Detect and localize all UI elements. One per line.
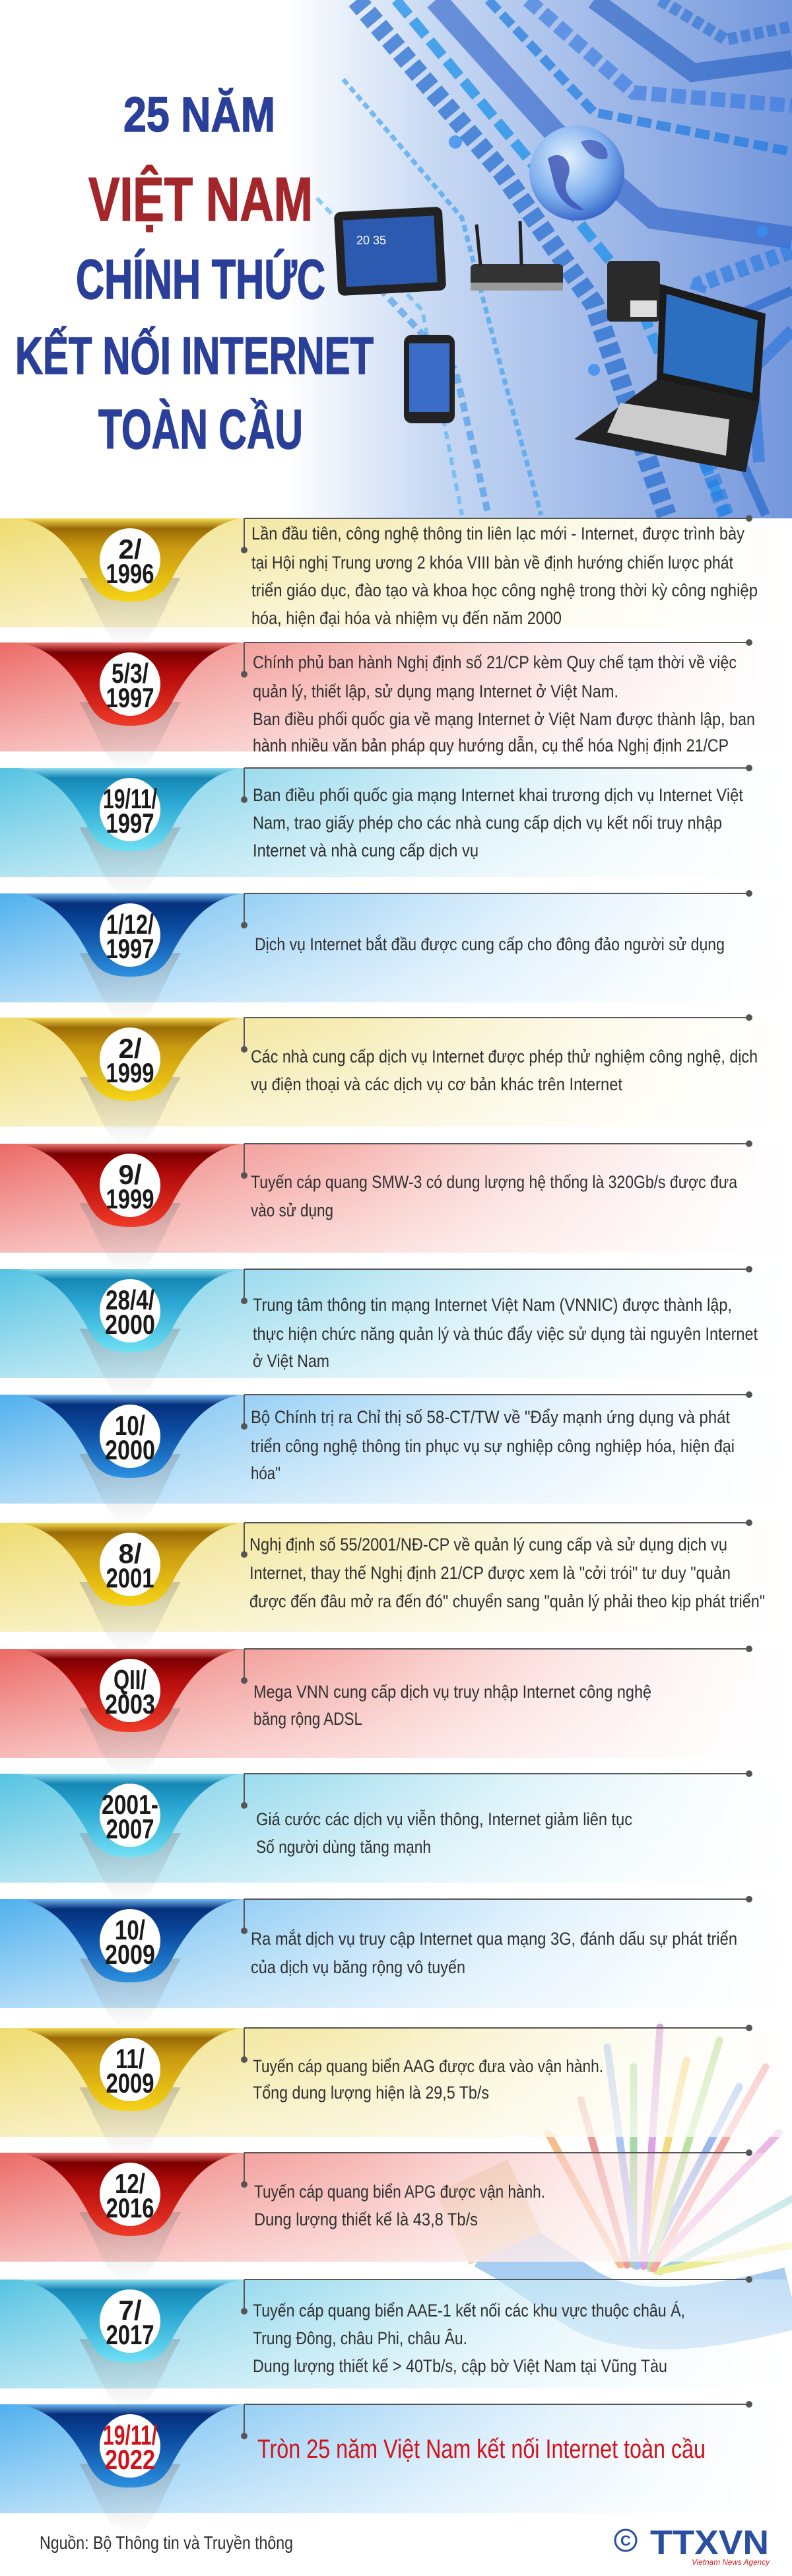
row 5: 2/1999 [0,1015,792,1150]
logo: TTXVN: TTXVN [650,2524,769,2562]
row 6: 9/1999: 1999 [106,1183,154,1214]
row 9: 8/2001: Nghị định số 55/2001/NĐ-CP về quản lý cung cấp và sử dụng dịch vụ [249,1535,727,1554]
row 11: 2001-2007: 2007 [106,1813,154,1844]
header background [0,0,792,518]
row 3: 19/11/1997: Ban điều phối quốc gia mạng Internet khai trương dịch vụ Internet Việt [253,785,743,805]
row 3: 19/11/1997: Internet và nhà cung cấp dịch vụ [253,841,478,860]
icon: phone [404,335,455,423]
row 14: 12/2016: Tuyến cáp quang biển APG được vận hành. [254,2182,545,2202]
row 1: 2/1996: hóa, hiện đại hóa và nhiệm vụ đến năm 2000 [251,608,562,628]
title: CHÍNH THỨC [76,248,325,310]
title: 25 NĂM [123,87,275,142]
title: VIỆT NAM [88,164,313,234]
row 9: 8/2001: Internet, thay thế Nghị định 21/CP được xem là "cởi trói" tư duy "quản [249,1563,731,1583]
row 11: 2001-2007: Số người dùng tăng mạnh [256,1837,431,1857]
row 9: 8/2001: 2001 [106,1562,154,1593]
row 13: 11/2009: 11/ [116,2043,145,2074]
icon: tablet: 20 35 [356,234,386,247]
row 1: 2/1996: 1996 [106,558,154,589]
icon: globe [529,125,624,221]
row 4: 1/12/1997 [0,891,792,1026]
source note: Nguồn: Bộ Thông tin và Truyền thông [40,2532,293,2553]
row 16: 19/11/2022: 2022 [105,2444,155,2475]
row 6: 9/1999: 9/ [118,1159,142,1190]
row 3: 19/11/1997: 19/11/ [103,783,157,814]
row 5: 2/1999: 2/ [118,1033,142,1064]
row 4: 1/12/1997: 1/12/ [106,909,154,940]
row 8: 10/2000: 2000 [105,1434,155,1465]
row 13: 11/2009 [0,2025,792,2160]
row 6: 9/1999: vào sử dụng [251,1201,333,1220]
row 10: QII/2003: băng rộng ADSL [253,1709,362,1729]
title: KẾT NỐI INTERNET [15,326,374,385]
row 12: 10/2009 [0,1897,792,2031]
row 10: QII/2003 [0,1646,792,1781]
row 8: 10/2000: 10/ [115,1410,145,1441]
row 7: 28/4/2000: 28/4/ [106,1284,154,1315]
logo: TTXVN [615,2524,770,2567]
icon: laptop [574,284,766,472]
row 3: 19/11/1997 [0,765,792,900]
row 2: 5/3/1997: quản lý, thiết lập, sử dụng mạng Internet ở Việt Nam. [253,681,618,701]
row 1: 2/1996 [0,516,792,650]
row 15: 7/2017: 2017 [106,2319,154,2350]
row 13: 11/2009: Tổng dung lượng hiện là 29,5 Tb/s [253,2083,489,2103]
row 8: 10/2000 [0,1392,792,1527]
row 13: 11/2009: 2009 [106,2068,154,2099]
row 4: 1/12/1997: Dịch vụ Internet bắt đầu được cung cấp cho đông đảo người sử dụng [255,934,725,954]
row 7: 28/4/2000: ở Việt Nam [253,1351,329,1371]
logo: TTXVN: Vietnam News Agency [692,2558,770,2567]
row 14: 12/2016: 12/ [115,2168,145,2199]
icon: modem box [607,261,660,322]
row 5: 2/1999: vụ điện thoại và các dịch vụ cơ bản khác trên Internet [251,1074,622,1094]
row 12: 10/2009: 10/ [115,1914,145,1945]
row 14: 12/2016 [0,2150,792,2285]
row 4: 1/12/1997: 1997 [106,933,154,964]
title [15,87,374,460]
row 15: 7/2017: 7/ [118,2295,142,2326]
row 10: QII/2003: 2003 [105,1688,155,1720]
row 9: 8/2001 [0,1520,792,1655]
row 12: 10/2009: của dịch vụ băng rộng vô tuyến [251,1957,465,1977]
row 2: 5/3/1997 [0,640,792,775]
icon: router [471,221,563,291]
row 5: 2/1999: 1999 [106,1057,154,1088]
row 15: 7/2017 [0,2277,792,2412]
row 1: 2/1996: 2/ [118,534,142,565]
decoration: fiber cable [436,2027,792,2318]
row 6: 9/1999 [0,1141,792,1276]
row 15: 7/2017: Trung Đông, châu Phi, châu Âu. [253,2328,467,2348]
row 10: QII/2003: QII/ [114,1664,147,1695]
row 7: 28/4/2000 [0,1267,792,1401]
row 11: 2001-2007: Giá cước các dịch vụ viễn thông, Internet giảm liên tục [256,1809,632,1829]
title: TOÀN CẦU [98,398,303,460]
row 14: 12/2016: Dung lượng thiết kế là 43,8 Tb/s [254,2210,478,2229]
row 15: 7/2017: Tuyến cáp quang biển AAE-1 kết nối các khu vực thuộc châu Á, [253,2301,685,2320]
row 11: 2001-2007: 2001- [102,1789,158,1820]
row 12: 10/2009: 2009 [105,1939,155,1970]
row 7: 28/4/2000: Trung tâm thông tin mạng Internet Việt Nam (VNNIC) được thành lập, [253,1295,732,1315]
row 3: 19/11/1997: Nam, trao giấy phép cho các nhà cung cấp dịch vụ kết nối truy nhập [253,813,722,833]
row 3: 19/11/1997: 1997 [106,808,154,839]
row 15: 7/2017: Dung lượng thiết kế > 40Tb/s, cập bờ Việt Nam tại Vũng Tàu [253,2356,667,2376]
row 7: 28/4/2000: 2000 [105,1309,155,1340]
row 14: 12/2016: 2016 [106,2192,154,2223]
row 2: 5/3/1997: hành nhiều văn bản pháp quy hướng dẫn, cụ thể hóa Nghị định 21/CP [253,735,729,755]
row 12: 10/2009: Ra mắt dịch vụ truy cập Internet qua mạng 3G, đánh dấu sự phát triển [251,1928,737,1949]
row 10: QII/2003: Mega VNN cung cấp dịch vụ truy nhập Internet công nghệ [253,1682,651,1702]
row 16: 19/11/2022: 19/11/ [103,2419,157,2451]
logo: TTXVN: C [620,2532,631,2549]
row 8: 10/2000: hóa" [251,1463,280,1483]
row 9: 8/2001: 8/ [118,1538,142,1569]
row 2: 5/3/1997: 1997 [106,682,154,713]
row 16: 19/11/2022 [0,2402,792,2536]
row 11: 2001-2007 [0,1771,792,1906]
row 2: 5/3/1997: 5/3/ [112,658,148,689]
icon: tablet [334,207,446,296]
row 8: 10/2000: triển công nghệ thông tin phục vụ sự nghiệp công nghiệp hóa, hiện đại [251,1436,735,1456]
row 13: 11/2009: Tuyến cáp quang biển AAG được đưa vào vận hành. [253,2056,603,2076]
row 8: 10/2000: Bộ Chính trị ra Chỉ thị số 58-CT/TW về "Đẩy mạnh ứng dụng và phát [251,1407,730,1427]
